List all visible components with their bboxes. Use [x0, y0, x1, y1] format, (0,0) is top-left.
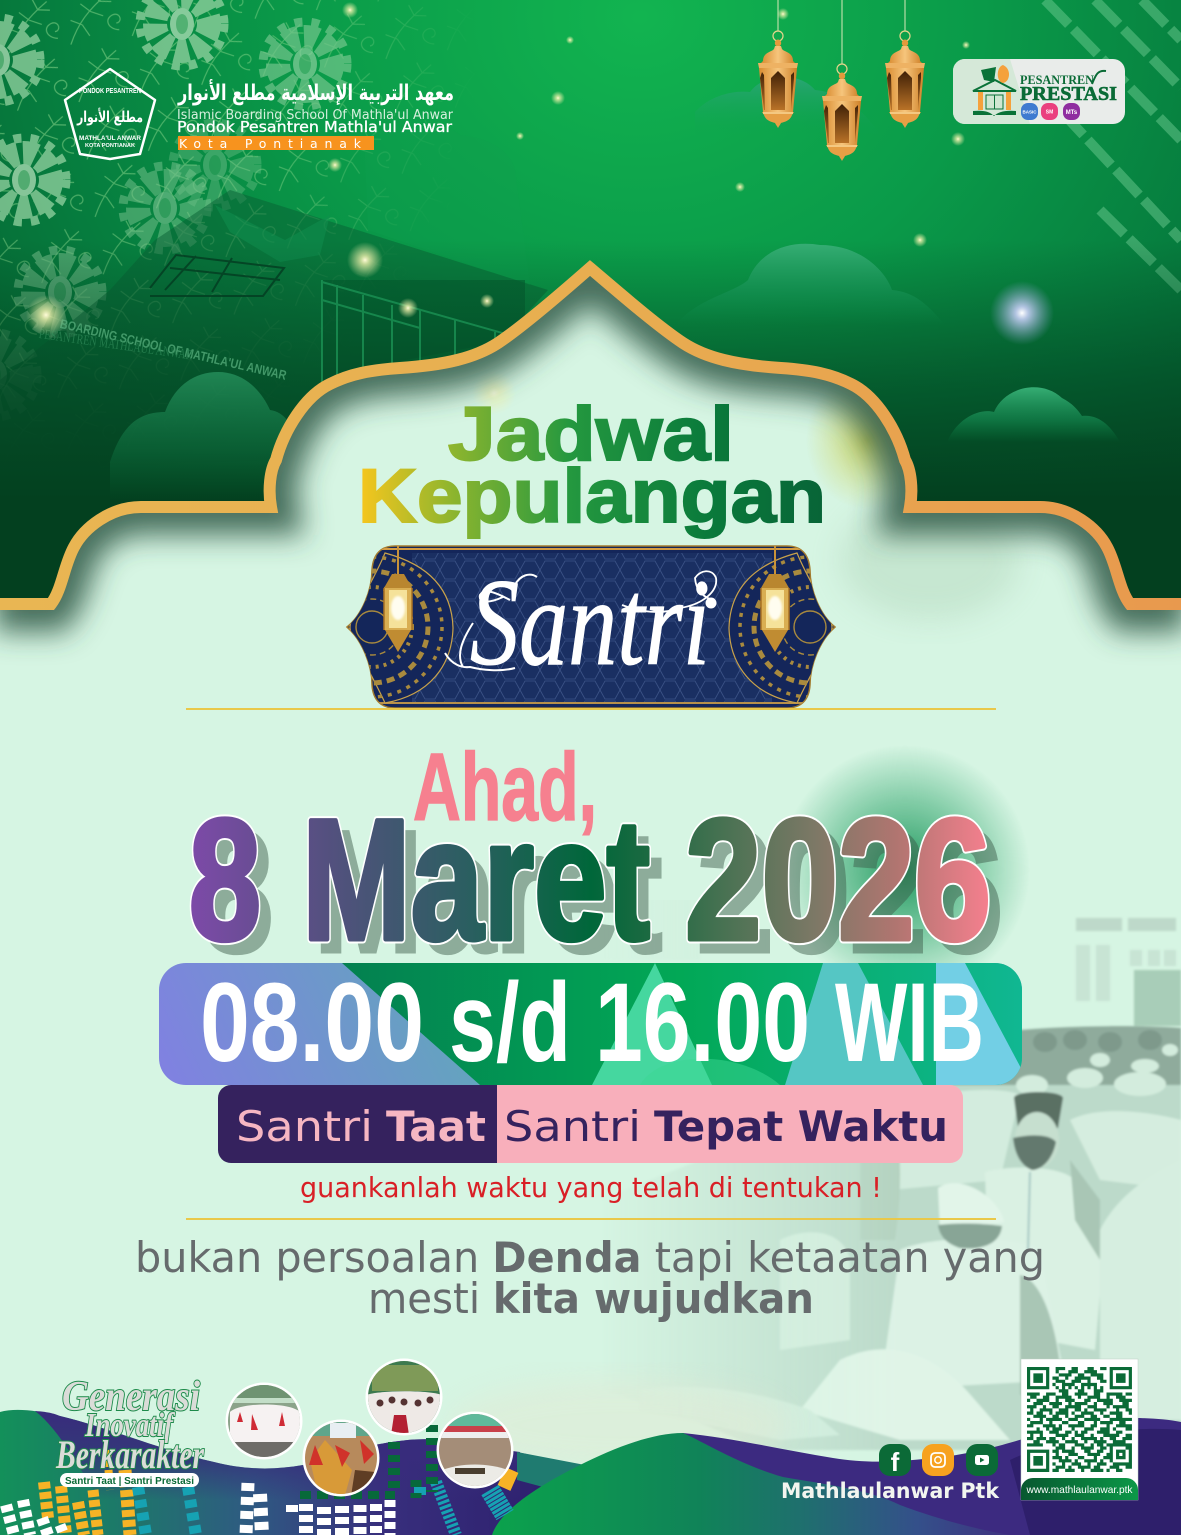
time text	[200, 960, 984, 1085]
hanging lanterns	[758, 0, 925, 161]
right mandala	[728, 552, 833, 704]
tagline: Generasi Inovatif Berkarakter: Berkarakter	[55, 1432, 204, 1477]
right shading	[1010, 1429, 1181, 1535]
slogan pill	[218, 1085, 963, 1163]
badge: Pesantren Prestasi: MTs	[1066, 110, 1078, 116]
logo: Pondok Pesantren emblem: MATHLA'UL ANWAR	[79, 135, 141, 142]
date fill: Maret	[302, 784, 650, 976]
date fill	[189, 784, 991, 976]
building linework: PESANTREN MATHLAUL ANWAR	[38, 327, 194, 363]
photo circle 2	[302, 1420, 380, 1496]
tagline: Generasi Inovatif Berkarakter: Santri Taat | Santri Prestasi	[65, 1476, 194, 1487]
sparkle inside arch	[472, 371, 516, 415]
yellow bars	[44, 1450, 512, 1535]
sparkles	[26, 2, 1054, 345]
green header panel	[0, 0, 1181, 620]
school name block	[177, 78, 454, 151]
cloud: right lower	[950, 387, 1116, 437]
date shadow: 8	[201, 796, 273, 988]
time text: 16.00	[595, 960, 810, 1085]
building flags	[215, 205, 330, 262]
QR code card	[1021, 1359, 1138, 1500]
warm floor tint	[450, 1380, 790, 1470]
slogan pill: Taat	[386, 1102, 486, 1151]
social: facebook: f	[891, 1447, 900, 1477]
title: Jadwal Kepulangan	[358, 392, 826, 539]
time text: 08.00	[200, 960, 424, 1085]
logo: Pondok Pesantren emblem: KOTA PONTIANAK	[85, 143, 135, 149]
date shadow	[201, 796, 1003, 988]
centre green hump	[492, 1433, 1010, 1535]
teal band	[517, 1452, 585, 1487]
photo: student left robe	[780, 1232, 850, 1350]
title: Jadwal Kepulangan: Jadwal	[448, 392, 734, 477]
day: Ahad: Ahad,	[413, 734, 597, 841]
left purple band	[35, 1411, 520, 1500]
message text	[135, 1233, 1045, 1323]
lantern right	[885, 0, 925, 128]
dark green bars	[300, 1425, 432, 1498]
building linework	[38, 254, 503, 382]
glow: green behind year	[780, 745, 1030, 995]
photo: student far right	[1100, 1160, 1181, 1420]
time text: WIB	[835, 960, 984, 1085]
time bar	[159, 960, 1022, 1085]
gold arch outline	[0, 268, 1181, 604]
date shadow: 2026	[697, 796, 1003, 988]
banner: Santri	[302, 546, 880, 708]
balcony rail	[150, 255, 284, 296]
tagline: Generasi Inovatif Berkarakter	[55, 1374, 204, 1487]
tagline: Generasi Inovatif Berkarakter: Inovatif	[84, 1407, 176, 1444]
depth gradient over header	[0, 258, 1181, 598]
photo: seated legs	[800, 1349, 1010, 1440]
photo: black cap student face	[1014, 1092, 1063, 1128]
lantern middle	[822, 0, 862, 161]
photo: student robe right of centre	[985, 1167, 1105, 1350]
left mandala	[349, 552, 454, 704]
photo circle 3	[366, 1358, 442, 1440]
photo: crowd in background	[950, 1026, 1181, 1085]
english name: Islamic Boarding School Of Mathla'ul Anwar	[177, 107, 453, 123]
photo: white cap student face	[937, 1182, 989, 1226]
background photo: students seated	[690, 918, 1181, 1450]
date outline: 2026	[685, 784, 991, 976]
date fill: 2026	[685, 784, 991, 976]
right purple wave	[683, 1418, 1181, 1535]
photo: shaded gaps	[862, 1163, 900, 1239]
title: Jadwal Kepulangan: Kepulangan	[358, 454, 826, 539]
badge: Pesantren Prestasi: SM	[1046, 110, 1053, 116]
city banner	[178, 136, 374, 150]
date outline: 8	[189, 784, 261, 976]
PESANTREN: PESANTREN	[1020, 72, 1095, 87]
photo: second row robes	[900, 1090, 1018, 1190]
time text: s/d	[449, 960, 571, 1085]
batik ornaments	[0, 0, 454, 398]
left body	[0, 1410, 600, 1535]
photo: student centre robe	[880, 1239, 1065, 1390]
date fill: 8	[189, 784, 261, 976]
lantern left	[758, 0, 798, 128]
windows	[323, 280, 525, 362]
glow: soft green near right arch	[840, 500, 1020, 620]
social: facebook	[879, 1444, 911, 1477]
white bars	[6, 1483, 390, 1535]
photo: hall windows and shelves	[1076, 918, 1181, 1027]
date outline	[189, 784, 991, 976]
badges	[1021, 103, 1038, 120]
diagonal stripes	[1045, 0, 1181, 290]
batik vines	[0, 0, 454, 377]
ghost building photo	[0, 131, 548, 398]
footer waves	[0, 1410, 1181, 1535]
slogan pill: Santri	[504, 1102, 641, 1151]
cloud: left lower	[110, 372, 286, 482]
date outline: Maret	[302, 784, 650, 976]
footer decorative bars	[6, 1425, 512, 1535]
QR modules	[1027, 1369, 1132, 1470]
tagline: Generasi Inovatif Berkarakter: Generasi	[62, 1374, 200, 1420]
photo circle 1	[226, 1382, 302, 1460]
building upper block	[366, 131, 378, 154]
arch inner shadow	[0, 268, 1181, 604]
cloud: right large	[708, 244, 924, 304]
social: instagram	[922, 1444, 954, 1476]
message text: mesti kita wujudkan	[368, 1274, 814, 1323]
PRESTASI: PRESTASI	[1020, 83, 1117, 105]
reminder text: guankanlah waktu yang telah di tentukan !	[300, 1171, 882, 1204]
photo circle 4	[436, 1412, 514, 1490]
date shadow: Maret	[314, 796, 662, 988]
slogan pill: Santri	[236, 1102, 373, 1151]
arabic name: معهد التربية الإسلامية مطلع الأنوار	[177, 78, 454, 106]
QR code card: www.mathlaulanwar.ptk	[1026, 1484, 1133, 1496]
building roof	[0, 190, 548, 398]
script flourish	[445, 575, 537, 670]
badge: Pesantren Prestasi	[953, 59, 1125, 124]
glow: yellow near arch	[806, 370, 930, 510]
indonesian name: Pondok Pesantren Mathla'ul Anwar	[177, 118, 453, 136]
slogan pill: Tepat Waktu	[654, 1102, 948, 1151]
logo: Pondok Pesantren emblem	[65, 69, 155, 159]
mini lanterns	[384, 546, 412, 652]
cloud: top behind lantern	[699, 78, 827, 110]
banner plate	[347, 546, 835, 708]
message text: bukan persoalan Denda tapi ketaatan yang	[135, 1233, 1045, 1282]
divider bottom	[186, 1218, 996, 1220]
icon: school building with book	[973, 65, 1016, 116]
divider top	[186, 708, 996, 710]
QR url strip	[1021, 1478, 1138, 1500]
header background	[0, 0, 1181, 489]
teal bars	[138, 1482, 505, 1535]
social handle: Mathlaulanwar Ptk	[781, 1479, 1000, 1503]
photo: floor and figures base	[690, 1084, 1181, 1450]
script word Santri: Santri	[470, 554, 710, 691]
logo: Pondok Pesantren emblem: PONDOK PESANTREN	[79, 88, 141, 95]
city name: Kota Pontianak	[179, 136, 362, 151]
building signage: BOARDING SCHOOL OF MATHLA'UL ANWAR	[59, 316, 289, 383]
badge: Pesantren Prestasi: BASIC	[1022, 110, 1037, 114]
logo: Pondok Pesantren emblem: مطلع الأنوار	[76, 108, 143, 126]
social: youtube	[966, 1444, 998, 1476]
tagline pill	[60, 1473, 199, 1487]
date: 8 Maret 2026	[189, 784, 1003, 988]
